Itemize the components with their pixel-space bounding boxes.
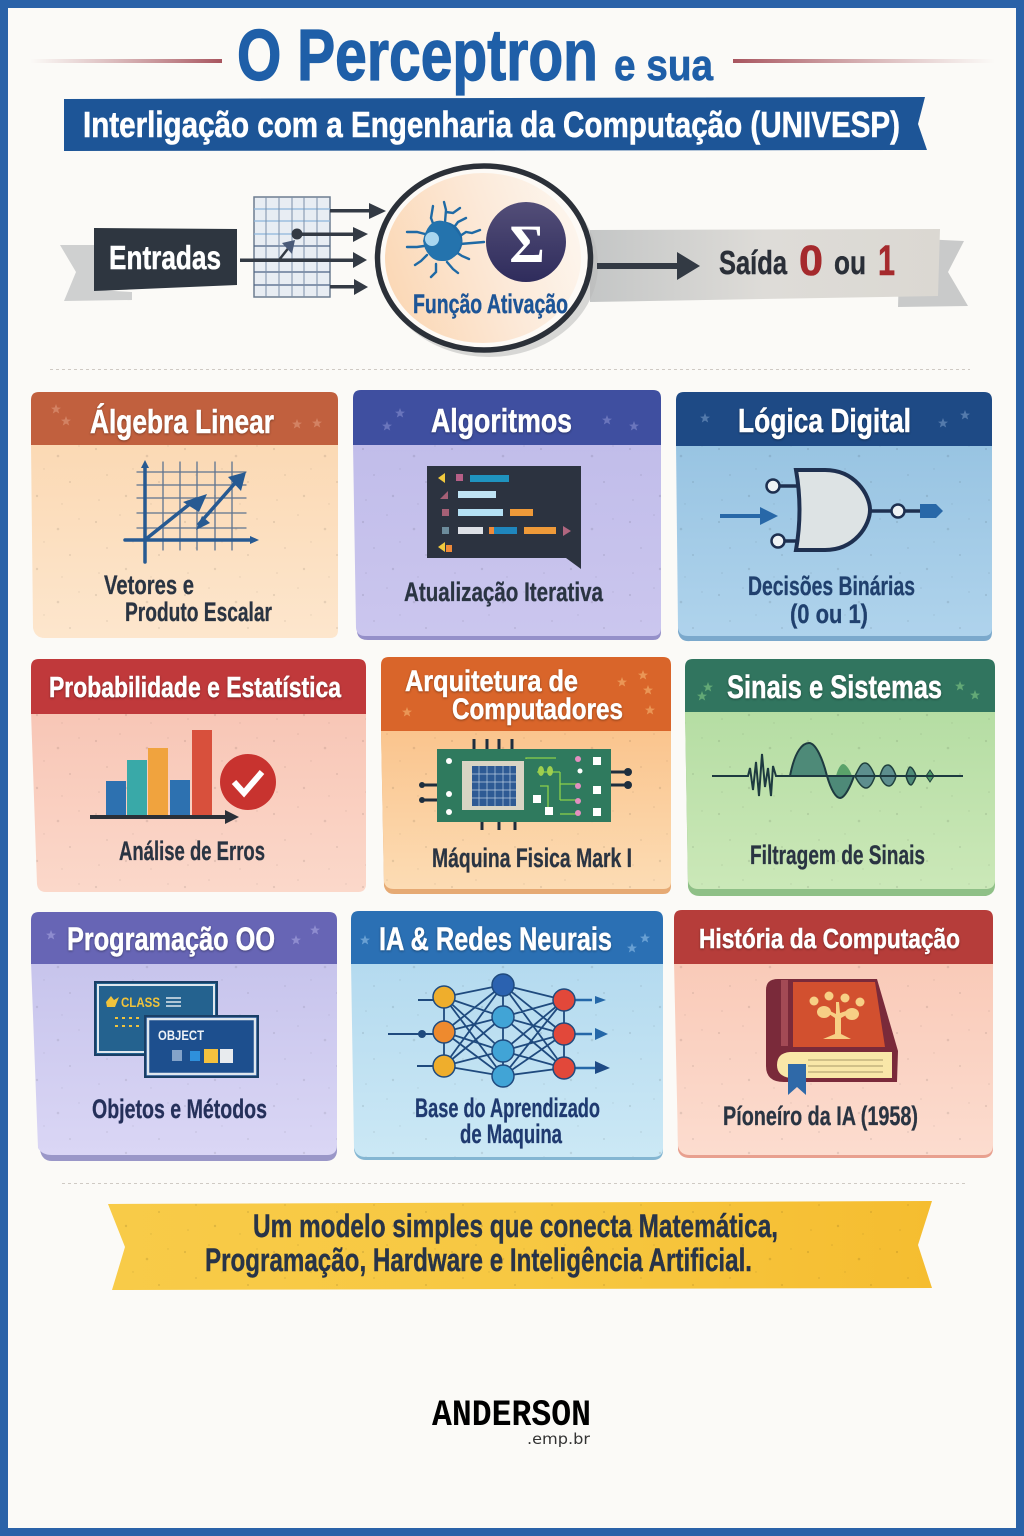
input grid: [254, 197, 330, 297]
output label: [719, 237, 895, 285]
panel: Probabilidade e Estatística: [31, 659, 366, 892]
logo: .emp.br: [527, 1430, 591, 1448]
panel: IA & Redes Neurais: [351, 911, 663, 1160]
icon: vectors on a grid: [125, 460, 259, 562]
icon: bar chart with check: [90, 730, 276, 824]
icon: class and object windows: [95, 982, 258, 1077]
output label: Saída: [719, 244, 787, 281]
heading line 1: Arquitetura de: [405, 665, 578, 698]
heading: Álgebra Linear: [90, 403, 274, 440]
icon: code window: [427, 466, 581, 569]
caption: Objetos e Métodos: [92, 1094, 267, 1124]
caption line 2: de Maquina: [460, 1119, 563, 1149]
panel: Álgebra Linear: [31, 392, 338, 638]
title: e sua: [614, 41, 713, 90]
panel: Arquitetura de Computadores: [381, 657, 671, 894]
heading: História da Computação: [699, 923, 960, 954]
panel: História da Computação: [674, 910, 993, 1158]
heading line 2: Computadores: [452, 693, 623, 726]
output label: 1: [878, 237, 895, 285]
heading: Lógica Digital: [738, 402, 911, 439]
input arrows: [240, 203, 386, 295]
logo: ANDERSON: [432, 1395, 591, 1437]
caption: Máquina Fisica Mark I: [432, 843, 632, 873]
caption: Base do Aprendizado: [415, 1093, 600, 1123]
closing ribbon: [108, 1201, 932, 1290]
icon: filtered signal wave: [712, 743, 963, 798]
panel: Programação OO: [31, 912, 337, 1161]
icon: book with tree: [766, 979, 898, 1095]
output arrow: [597, 252, 700, 280]
output label: ou: [834, 244, 866, 281]
activation function node: [378, 166, 598, 357]
heading: Programação OO: [67, 921, 275, 957]
caption: Píoneíro da IA (1958): [723, 1101, 918, 1131]
icon: neural network: [388, 974, 610, 1087]
panel: Sinais e Sistemas: [685, 659, 995, 896]
panel: Algoritmos: [353, 390, 661, 640]
activation function node: Função Ativação: [413, 289, 568, 319]
output ribbon: [590, 229, 968, 307]
perceptron flow diagram: [60, 166, 968, 357]
closing ribbon: Um modelo simples que conecta Matemática,: [253, 1208, 778, 1244]
icon: sigma: Σ: [509, 214, 545, 274]
heading: Algoritmos: [431, 402, 572, 439]
heading: Sinais e Sistemas: [727, 669, 942, 705]
caption: Decisões Binárias: [748, 571, 915, 601]
caption: Filtragem de Sinais: [750, 840, 925, 870]
caption: Atualização Iterativa: [404, 577, 604, 607]
inputs ribbon: [60, 228, 237, 301]
title: [30, 16, 995, 96]
panel: Lógica Digital: [676, 392, 992, 641]
output label: 0: [799, 237, 823, 285]
heading: IA & Redes Neurais: [379, 921, 612, 957]
subtitle banner: [64, 97, 927, 151]
icon: class and object windows: OBJECT: [158, 1027, 204, 1043]
icon: neuron: [407, 202, 484, 277]
heading: Probabilidade e Estatística: [49, 672, 342, 704]
icon: sigma: [486, 202, 566, 282]
icon: circuit board: [419, 739, 632, 830]
caption: Análise de Erros: [119, 836, 265, 866]
caption: Vetores e: [104, 570, 194, 600]
icon: logic gate: [720, 470, 943, 550]
inputs ribbon: Entradas: [109, 239, 221, 276]
caption line 2: Produto Escalar: [125, 597, 272, 627]
caption line 2: (0 ou 1): [790, 599, 868, 629]
title: O Perceptron: [237, 16, 598, 96]
icon: class and object windows: CLASS: [121, 994, 160, 1010]
closing ribbon: Programação, Hardware e Inteligência Artificial.: [205, 1242, 752, 1278]
